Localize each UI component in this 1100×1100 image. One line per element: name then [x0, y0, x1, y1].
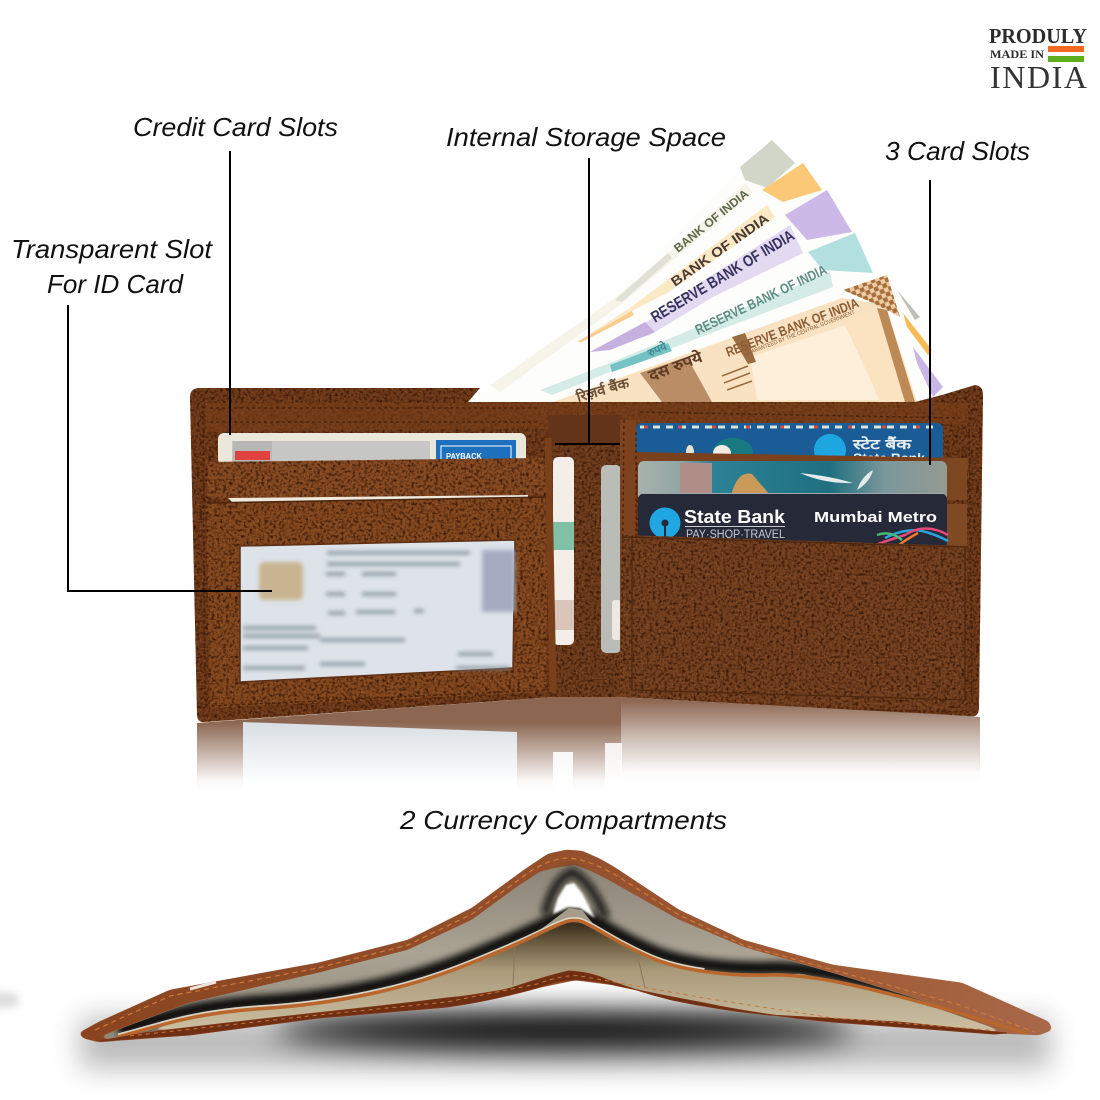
transparent ID window: [240, 540, 515, 682]
mumbai metro: Mumbai Metro: [814, 509, 937, 526]
label: Credit Card Slots: [133, 112, 338, 142]
blurred id text: [243, 553, 510, 668]
pink panel on teal card: [680, 463, 712, 495]
badge: Produly Made in India: [989, 24, 1087, 95]
callout: Internal Storage Space: [446, 122, 726, 444]
note: grey: [490, 140, 920, 392]
metro swirl: [877, 528, 948, 548]
middle leather edge pale: [118, 918, 704, 1034]
blurred photo: [482, 550, 515, 612]
note: orange ten rupee: GUARANTEED BY THE CENTRAL GOVERNMENT: [744, 310, 856, 358]
badge flag stripes: [1048, 46, 1084, 62]
orange arc on teal card: [731, 473, 770, 495]
center right card: [601, 465, 621, 653]
wallet outer grain: [190, 385, 983, 722]
middle storage panel: [548, 415, 622, 697]
right reflection fade: [621, 697, 990, 795]
reflected center cards: [553, 743, 622, 792]
wide soft shadow: [80, 1018, 1050, 1068]
SBI logo dark card: [650, 508, 680, 539]
wallet inner top band: [206, 403, 972, 432]
label line one: Transparent Slot: [11, 234, 214, 264]
note: orange ten rupee: RESERVE BANK OF INDIA: [724, 295, 861, 360]
right side leather strips: [947, 458, 967, 547]
reflected leather: [197, 697, 980, 792]
badge text: Made in: MADE IN: [990, 49, 1045, 61]
right middle teal card: [638, 461, 947, 501]
note: grey: BANK OF INDIA: [671, 186, 752, 255]
gap showing white: [553, 883, 595, 918]
note: teal: RESERVE BANK OF INDIA: [692, 261, 829, 338]
wordmark underline: [685, 526, 785, 527]
center fold seam: [513, 945, 645, 988]
note: teal: [540, 233, 873, 395]
left card sliver: [228, 495, 528, 502]
note: teal: रुपये: [644, 339, 669, 360]
wallet outer body: [190, 385, 983, 722]
left credit card, top: [218, 433, 526, 465]
scuff highlight: [190, 982, 216, 989]
left edge shadow spot: [0, 992, 20, 1008]
note: orange: BANK OF INDIA: [668, 210, 772, 289]
right band between cards: [633, 452, 968, 470]
folk art face: [686, 438, 753, 466]
hindi bank name: स्टेट बैंक: [852, 436, 913, 452]
note: orange ten rupee: [553, 275, 917, 405]
leader line: [929, 180, 931, 465]
note: orange ten rupee: दस रुपये: [645, 347, 706, 385]
wallet reflection: [190, 697, 990, 795]
badge text: Produly: PRODULY: [989, 24, 1087, 48]
left lower pocket with window frame: [206, 497, 548, 708]
middle leather edge: [118, 920, 1026, 1037]
lower stitching: [130, 976, 990, 1036]
leader line: [229, 151, 231, 435]
blurred chip: [259, 562, 303, 600]
note: orange ten rupee: रिज़र्व बैंक: [573, 374, 632, 405]
tan lining of lower compartment: [144, 922, 1007, 1033]
left stitching: [203, 408, 550, 706]
lining of upper compartment: [99, 865, 1026, 1041]
english bank name: State Bank: [853, 450, 925, 466]
lower wallet shadow: [0, 992, 1050, 1068]
left upper pocket: [207, 458, 546, 498]
leader line: [555, 158, 620, 444]
left credit card, top: PAYBACK: [446, 452, 482, 461]
outer leather: [79, 850, 1052, 1042]
compartment inner shadow: [118, 914, 1026, 1030]
banknotes fan: [470, 140, 943, 405]
badge text: India: INDIA: [990, 59, 1087, 95]
center reinforcement edge: [548, 438, 553, 692]
lower leather band: [99, 971, 1007, 1041]
right stitching: [621, 405, 972, 712]
right side strap: [620, 420, 636, 697]
callout: Transparent Slot For ID Card: [11, 234, 272, 591]
note: purple: [590, 190, 943, 397]
right upper blue card: [636, 423, 943, 466]
state bank wordmark: State Bank: [684, 507, 786, 527]
white note base: [470, 140, 943, 403]
SBI logo: [814, 434, 846, 466]
note: purple: RESERVE BANK OF INDIA: [648, 227, 798, 326]
upper stitching: [95, 858, 1035, 1032]
label line two: For ID Card: [47, 269, 185, 299]
right dark state bank card: [638, 493, 948, 549]
label: 3 Card Slots: [885, 136, 1030, 166]
heading: 2 Currency Compartments: 2 Currency Compartments: [399, 805, 727, 835]
pay shop travel: PAY·SHOP·TRAVEL: [686, 529, 786, 541]
peak inner shadow: [545, 872, 606, 918]
right pocket seams: [622, 537, 968, 700]
white streak on teal card: [800, 470, 873, 490]
left reflection fade: [190, 697, 621, 795]
leader line: [68, 305, 272, 591]
wallet: open interior: [190, 385, 983, 722]
center left card: [553, 457, 574, 645]
folded wallet side view: [79, 850, 1052, 1042]
reflected window: [243, 722, 517, 792]
left pocket seam: [207, 497, 548, 503]
core dark shadow: [275, 1012, 855, 1048]
note: orange: [577, 163, 932, 355]
label: Internal Storage Space: [446, 122, 726, 152]
right pocket: [622, 535, 968, 712]
pale lining bump at fold: [540, 908, 598, 930]
